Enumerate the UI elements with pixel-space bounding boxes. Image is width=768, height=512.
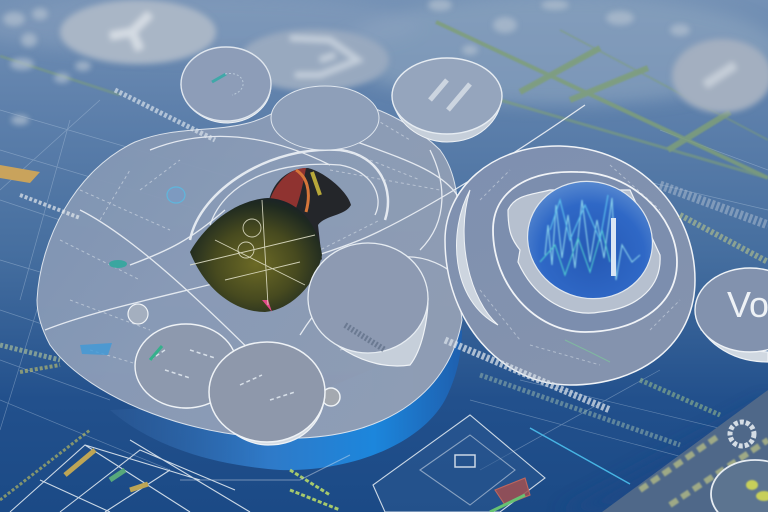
panel: right translucent disc with chart lens [445,146,695,385]
coin: lower right stacked ring [308,243,428,366]
coin: lower center [209,342,325,445]
coin: upper center [271,86,379,150]
coin: lower left [135,324,237,408]
green scribble [565,340,610,362]
inner ring base [508,190,660,313]
coin letters: Vo [727,284,768,325]
coin: upper right [392,58,502,142]
left thick rim band [457,190,498,325]
panel: large translucent disc [37,98,585,470]
coin: upper left [181,47,271,123]
middle ring [493,172,677,332]
small ring dot lower [128,304,148,324]
disc hatch marks [480,165,680,365]
coin: right edge with letter V [695,268,768,362]
bottom blueprint diagram [0,415,630,512]
small teal dot [109,260,127,268]
green chart lines top right [0,22,768,178]
lens spike chart [540,195,640,280]
isometric building [373,415,545,512]
icon: gear [730,422,754,446]
coin: top right blurred [672,39,768,113]
small background dashes [3,0,690,125]
outer disc [445,146,695,385]
icon: dark sphere with red plume [190,168,351,312]
disc body [37,98,462,438]
small ring dot bottom [322,388,340,406]
panel: bottom right card [602,390,768,512]
coin: top center blurred [239,29,389,91]
left circuit grid [0,430,350,512]
disc contour lines [45,105,585,400]
blurred background coins [60,0,768,113]
coin: bottom right [711,460,768,512]
lens glass [511,164,669,316]
yellow dots on coin [746,480,768,501]
dashed data bands [0,90,768,445]
icon: orange tag left [0,165,40,183]
chart bright bar [611,218,616,276]
disc small marks [60,110,440,365]
coin: top left blurred [60,0,216,64]
background: blueprint grid lines [0,100,768,480]
small ring dot [167,187,185,203]
blue disc rim [110,330,462,470]
blue patch at disc edge [80,343,112,355]
